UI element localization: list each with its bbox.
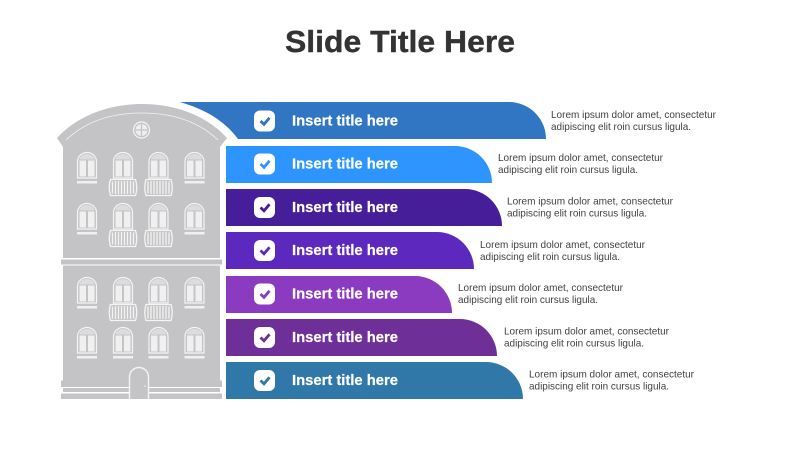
row 4 [226, 232, 645, 269]
building roof [57, 104, 227, 147]
upper facade [63, 145, 220, 258]
description: Lorem ipsum dolor amet, consectetur [498, 152, 663, 164]
bar [226, 189, 502, 226]
icon: check [254, 197, 275, 218]
building illustration [57, 104, 227, 399]
icon: check [254, 154, 275, 174]
icon: check [254, 370, 275, 391]
row title: Insert title here [292, 114, 398, 130]
row title: Insert title here [292, 243, 398, 259]
row 6 [226, 319, 669, 356]
description: Lorem ipsum dolor amet, consectetur [529, 368, 694, 380]
description: Lorem ipsum dolor amet, consectetur [507, 196, 673, 208]
bar [180, 102, 546, 139]
base steps [61, 380, 222, 399]
round attic window [134, 122, 150, 138]
floor ledge [61, 260, 222, 264]
balconies [109, 180, 172, 320]
description: Lorem ipsum dolor amet, consectetur [504, 326, 669, 338]
description: adipiscing elit roin cursus ligula. [507, 208, 647, 220]
row 3 [226, 189, 673, 226]
row title: Insert title here [292, 200, 398, 216]
lower facade [63, 266, 220, 380]
row 5 [226, 276, 623, 313]
windows [77, 152, 204, 358]
icon: check [254, 110, 275, 132]
bar [226, 319, 497, 356]
row title: Insert title here [292, 330, 398, 346]
description: adipiscing elit roin cursus ligula. [498, 164, 638, 176]
description: adipiscing elit roin cursus ligula. [458, 294, 598, 306]
row 2 [226, 146, 663, 183]
icon: check [254, 284, 275, 304]
title: Slide Title Here [285, 24, 515, 59]
description: adipiscing elit roin cursus ligula. [480, 251, 620, 263]
description: Lorem ipsum dolor amet, consectetur [551, 109, 716, 121]
row title: Insert title here [292, 373, 398, 389]
description: Lorem ipsum dolor amet, consectetur [480, 239, 645, 251]
description: Lorem ipsum dolor amet, consectetur [458, 282, 623, 294]
bar [226, 146, 492, 183]
description: adipiscing elit roin cursus ligula. [551, 121, 691, 133]
door [130, 368, 148, 399]
bar [226, 276, 452, 313]
icon: check [254, 240, 275, 261]
bar [226, 362, 523, 399]
row title: Insert title here [292, 286, 398, 302]
icon: check [254, 327, 275, 348]
description: adipiscing elit roin cursus ligula. [504, 338, 644, 350]
row title: Insert title here [292, 156, 398, 172]
row 1 [180, 102, 716, 139]
description: adipiscing elit roin cursus ligula. [529, 380, 669, 392]
row 7 [226, 362, 694, 399]
bar [226, 232, 474, 269]
